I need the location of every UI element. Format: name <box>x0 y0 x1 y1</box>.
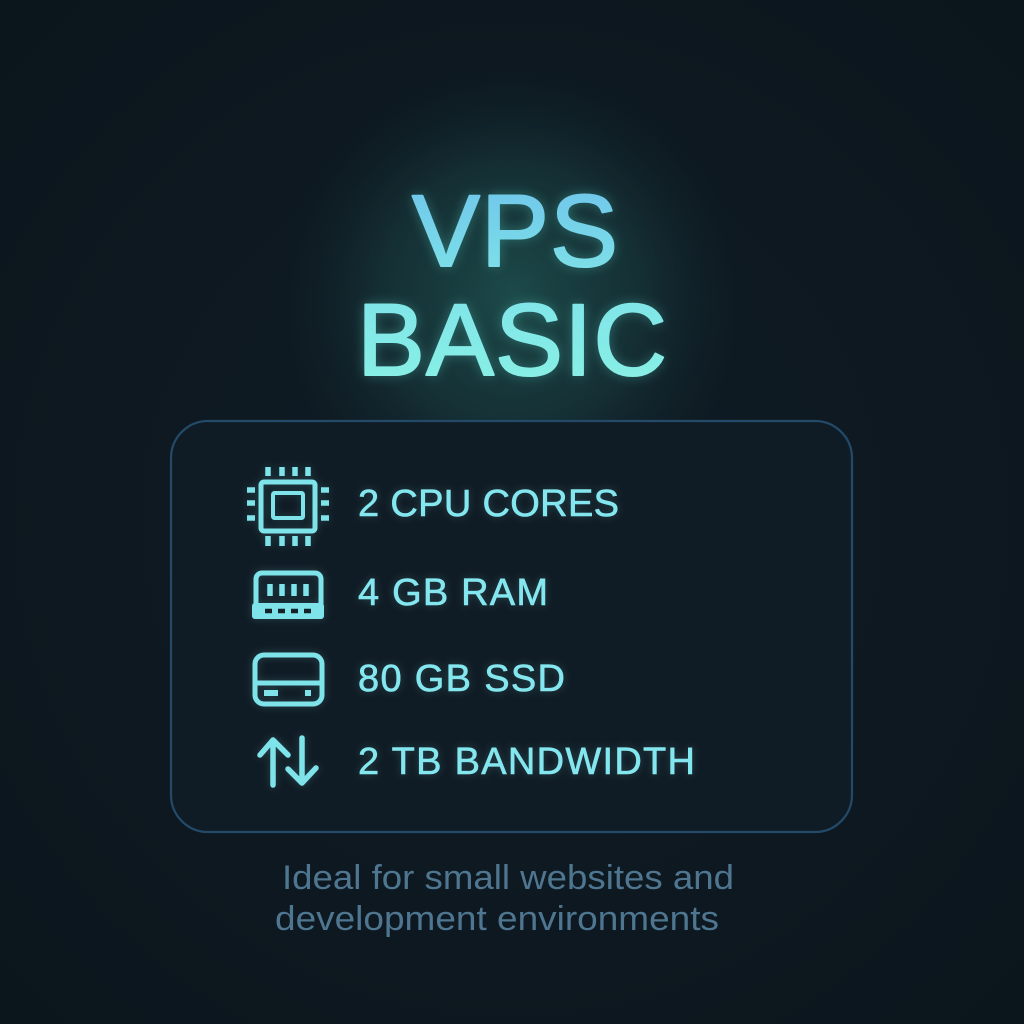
text: ssd: 80 GB SSD <box>358 658 565 700</box>
title <box>357 174 667 397</box>
text: ram: 4 GB RAM <box>358 572 548 614</box>
icon: ssd drive <box>255 655 322 704</box>
icon: up and down arrows <box>260 738 316 785</box>
icon: cpu chip <box>247 467 329 546</box>
icon: ram module <box>252 573 324 619</box>
title: VPS <box>412 174 618 288</box>
title: BASIC <box>357 283 667 397</box>
footer description: Ideal for small websites and <box>282 859 734 897</box>
title: BASIC <box>357 283 667 397</box>
panel: specs card <box>171 421 852 832</box>
text: bandwidth: 2 TB BANDWIDTH <box>358 741 695 783</box>
title glow <box>240 50 784 540</box>
footer description <box>275 859 734 938</box>
title: VPS <box>412 174 618 288</box>
text: cpu cores: 2 CPU CORES <box>358 483 619 525</box>
footer description: development environments <box>275 900 719 938</box>
